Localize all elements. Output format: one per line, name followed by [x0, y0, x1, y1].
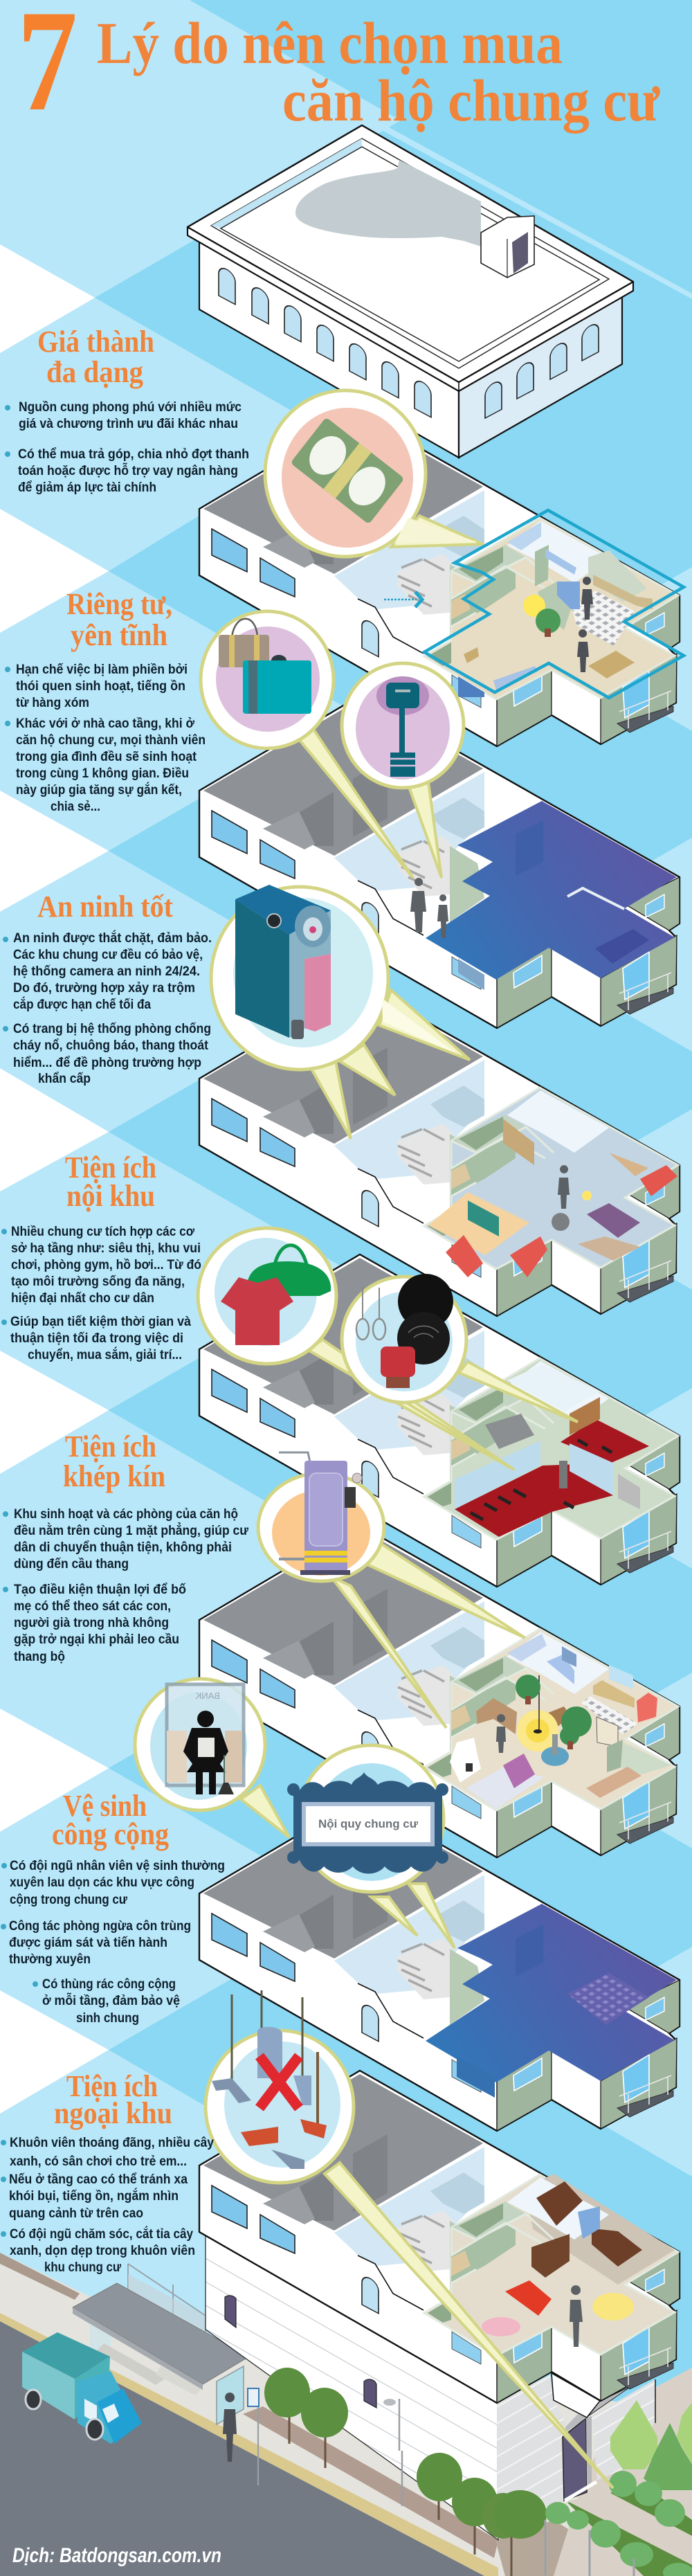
section 2: text: Khác với ở nhà cao tầng, khi ở — [16, 717, 194, 731]
floor 2 interior: blue-violet highlighted apartment — [410, 801, 677, 990]
floor 3 interior: community lounge — [424, 1088, 678, 1277]
bubble: money — [265, 390, 483, 557]
section 7: text: khu chung cư — [44, 2260, 121, 2275]
floor 7 slab — [199, 2071, 680, 2403]
floor 1 interior: highlighted model apartment — [384, 510, 684, 699]
bus stop, fence and person — [73, 2264, 259, 2485]
bubble: cleaner — [135, 1679, 289, 1837]
section 2: text: trong gia đình đều sẽ sinh hoạt — [16, 750, 197, 764]
section 6: text: Có đội ngũ nhân viên vệ sinh thường — [10, 1859, 225, 1873]
section 7: text: Khuôn viên thoáng đãng, nhiều cây — [10, 2136, 214, 2150]
section 3: text: cháy nổ, chuông báo, thang thoát — [13, 1038, 209, 1053]
section 5: text: Tiện ích — [65, 1430, 156, 1463]
section 5: text: thang bộ — [14, 1650, 65, 1664]
main title — [17, 0, 660, 141]
section 7: text: ngoại khu — [54, 2096, 172, 2130]
floor 1 slab — [199, 414, 680, 746]
section 5: text: dùng đến cầu thang — [14, 1557, 129, 1571]
section 5: text: người già trong nhà không — [14, 1616, 169, 1630]
section 7: text: quang cảnh từ trên cao — [9, 2206, 143, 2221]
section 2: text: thói quen sinh hoạt, tiếng ồn — [16, 679, 185, 694]
section 4: text: tạo môi trường sống đa năng, — [11, 1275, 185, 1289]
section 7: text: xanh, có sân chơi cho trẻ em... — [10, 2154, 187, 2169]
section 6: text: Vệ sinh — [63, 1789, 147, 1823]
section 1: text: Giá thành — [37, 325, 154, 359]
section 3: text: An ninh được thắt chặt, đảm bảo. — [13, 930, 212, 946]
bubble: shop goods — [198, 1228, 514, 1470]
section 3: text: Có trang bị hệ thống phòng chống — [13, 1022, 211, 1036]
section 7: text: xanh, dọn dẹp trong khuôn viên — [10, 2244, 195, 2258]
section 1: text: đa dạng — [46, 355, 143, 389]
section 5: text: mẹ có thể theo sát các con, — [14, 1599, 171, 1614]
section 3: text: Các khu chung cư đều có bảo vệ, — [13, 948, 203, 962]
section 4: text: nội khu — [66, 1179, 155, 1213]
section 6: text — [1, 1789, 225, 2026]
floor 3 slab — [199, 984, 680, 1316]
section 4: text: thuận tiện tối đa trong việc di — [10, 1331, 183, 1346]
section 7: text: khói bụi, tiếng ồn, ngắm nhìn — [9, 2188, 179, 2204]
section 4: text: Nhiều chung cư tích hợp các cơ — [11, 1225, 194, 1239]
floor 6 interior: blue-violet highlighted apartment — [426, 1904, 677, 2098]
section 5: text: Tạo điều kiện thuận lợi để bố — [14, 1583, 186, 1597]
section 6: text: công cộng — [52, 1817, 169, 1851]
section 3: text: hệ thống camera an ninh 24/24. — [13, 964, 200, 979]
section 4: text: Giúp bạn tiết kiệm thời gian và — [10, 1315, 191, 1329]
trees and bushes — [264, 2368, 692, 2576]
section 6: text: sinh chung — [76, 2011, 139, 2026]
street and ground — [0, 2253, 692, 2576]
bubble: gym equipment — [342, 1274, 578, 1470]
section 4: text: chuyển, mua sắm, giải trí... — [28, 1347, 182, 1362]
bubble: luggage — [201, 611, 413, 878]
section 5: text: Khu sinh hoạt và các phòng của căn hộ — [14, 1507, 238, 1522]
bubble: water heater — [258, 1452, 525, 1728]
floor 2 slab — [199, 696, 680, 1028]
section 1: text: giá và chương trình ưu đãi khác nhau — [19, 417, 238, 431]
section 2: text: yên tĩnh — [71, 618, 167, 652]
section 4: text: Tiện ích — [65, 1151, 156, 1185]
ground-floor facade — [206, 2181, 655, 2540]
bubble: building rules sign: Nội quy chung cư — [318, 1817, 419, 1830]
section 7: text: Tiện ích — [66, 2069, 158, 2103]
section 1: text — [5, 325, 249, 495]
section 2: text: căn hộ chung cư, mọi thành viên — [16, 733, 206, 748]
section 6: text: Công tác phòng ngừa côn trùng — [9, 1919, 191, 1934]
section 3: text — [3, 890, 212, 1086]
section 3: text: cắp được hạn chế tối đa — [13, 997, 151, 1012]
section 5: text: khép kín — [63, 1459, 165, 1493]
section 6: text: cộng trong chung cư — [10, 1893, 127, 1907]
section 6: text: được giám sát và tiến hành — [9, 1936, 167, 1950]
section 1: text: Có thể mua trả góp, chia nhỏ đợt thanh — [18, 447, 249, 462]
section 2: text: này giúp gia tăng sự gắn kết, — [16, 782, 182, 798]
section 2: text: chia sẻ... — [51, 800, 100, 814]
section 4: text: chơi, phòng gym, hồ bơi... Từ đó — [11, 1258, 201, 1272]
section 1: text: để giảm áp lực tài chính — [18, 480, 156, 495]
floor 5 interior: living room and fireplace — [424, 1629, 678, 1810]
bubble: security camera — [211, 885, 470, 1139]
bubble: cleaner: BANK — [195, 1691, 220, 1701]
section 5: text: đều nằm trên cùng 1 mặt phẳng, giúp cư — [14, 1523, 248, 1538]
floor 4 interior: gym with red carpet — [424, 1358, 678, 1540]
section 3: text: hiểm... để đề phòng trường hợp — [13, 1056, 201, 1070]
floor 4 slab — [199, 1254, 680, 1587]
floor 7 interior: brown furniture apartment — [424, 2174, 678, 2356]
section 6: text: xuyên lau dọn các khu vực công — [10, 1875, 194, 1890]
section 2: text: Riêng tư, — [66, 587, 172, 621]
section 2: text: trong cùng 1 không gian. Điều — [16, 766, 189, 781]
main title: Lý do nên chọn mua — [97, 10, 563, 76]
section 3: text: An ninh tốt — [37, 890, 173, 924]
bubble: key — [342, 663, 464, 878]
section 4: text: hiện đại nhất cho cư dân — [11, 1291, 154, 1306]
section 7: text: Nếu ở tầng cao có thể tránh xa — [9, 2172, 188, 2187]
floor 6 slab — [199, 1799, 680, 2131]
bubble: building rules sign — [287, 1745, 455, 1948]
section 7: text: Có đội ngũ chăm sóc, cắt tỉa cây — [10, 2226, 193, 2242]
section 1: text: Nguồn cung phong phú với nhiều mức — [19, 400, 242, 415]
section 4: text: sở hạ tầng như: siêu thị, khu vui — [11, 1241, 201, 1256]
section 1: text: toán hoặc được hỗ trợ vay ngân hàng — [18, 463, 238, 478]
section 5: text: gặp trở ngại khi phải leo cầu — [14, 1632, 179, 1647]
section 6: text: ở mỗi tầng, đảm bảo vệ — [42, 1993, 180, 2008]
section 5: text: dân di chuyển thuận tiện, không phải — [14, 1540, 232, 1555]
section 4: text — [1, 1151, 201, 1362]
roof and top storey — [188, 125, 633, 458]
floor 5 slab — [199, 1525, 680, 1857]
section 6: text: thường xuyên — [9, 1952, 91, 1967]
section 2: text: Hạn chế việc bị làm phiền bởi — [16, 663, 188, 677]
section 5: text — [3, 1430, 248, 1664]
source credit: Dịch: Batdongsan.com.vn — [12, 2544, 221, 2567]
section 2: text: từ hàng xóm — [16, 696, 89, 710]
bubble: gardening tools — [206, 1990, 613, 2488]
delivery truck — [22, 2332, 142, 2444]
main title: căn hộ chung cư — [282, 67, 660, 134]
section 6: text: Có thùng rác công cộng — [42, 1977, 176, 1992]
section 3: text: Do đó, trường hợp xảy ra trộm — [13, 981, 195, 996]
section 2: text — [5, 587, 206, 814]
section 3: text: khẩn cấp — [38, 1072, 91, 1086]
section 7: text — [1, 2069, 214, 2275]
